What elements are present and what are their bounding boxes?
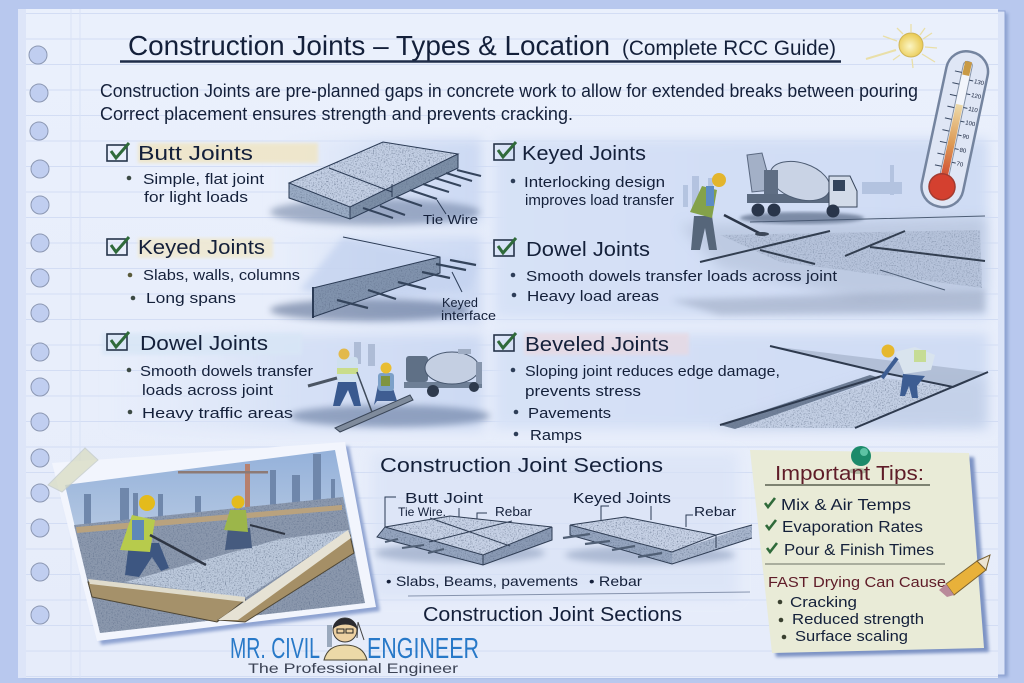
- effects list: Surface scaling: [795, 628, 908, 645]
- illustration: worker with rake: [690, 173, 769, 250]
- tips list: Evaporation Rates: [782, 519, 923, 536]
- panel: construction joint sections: [375, 455, 752, 626]
- heading: sections bottom: Construction Joint Sections: [423, 604, 682, 626]
- title: Construction Joints – Types & Location: [128, 30, 610, 61]
- heading: dowel joints: Dowel Joints: [526, 239, 650, 261]
- subheading: fast drying: FAST Drying Can Cause: [768, 574, 946, 591]
- panel: keyed and dowel joints right: [494, 142, 985, 315]
- logo wordmark: MR. CIVIL: [230, 633, 320, 665]
- heading highlight: [138, 238, 273, 258]
- bullet text: for light loads: [144, 189, 248, 206]
- bullet text: keyed joints: improves load transfer: [525, 192, 674, 209]
- icon: checkbox: [494, 333, 516, 351]
- effects list: Reduced strength: [792, 611, 924, 628]
- worker front: [120, 495, 206, 577]
- bullet text: [128, 267, 300, 307]
- bullet text: dowel joints: [511, 268, 838, 305]
- title: [120, 30, 841, 62]
- label: keyed interface: interface: [441, 308, 496, 323]
- diagram: butt joint: Tie Wire.: [398, 505, 446, 519]
- photo formwork: [88, 530, 354, 622]
- tips list: Mix & Air Temps: [781, 497, 911, 514]
- icon: thermometer: 110: [968, 107, 979, 115]
- bullet text: dowel joints: Heavy load areas: [527, 288, 659, 305]
- diagram: butt joint: Butt Joint: [405, 490, 484, 507]
- bullet text: Sloping joint reduces edge damage,: [525, 363, 780, 380]
- illustration background washes: [105, 139, 988, 599]
- binder holes: [29, 46, 49, 624]
- diagram: keyed joints: [563, 490, 752, 564]
- logo wordmark: [230, 633, 479, 665]
- sticky note: important tips: [750, 446, 990, 657]
- worker two: [374, 362, 397, 405]
- diagram: butt joint: [375, 490, 552, 565]
- illustration: mixer truck: [740, 153, 864, 224]
- worker one: [308, 348, 372, 412]
- panel: beveled joints: [494, 333, 988, 444]
- photo skyline and crane: [84, 454, 335, 526]
- icon: push pin: [849, 446, 871, 474]
- caption: • Slabs, Beams, pavements: [386, 573, 578, 589]
- heading: keyed joints: Keyed Joints: [522, 143, 646, 165]
- illustration: keyed joint wall: [270, 237, 478, 321]
- effects list: Cracking: [790, 594, 857, 611]
- icon: checkbox: [494, 142, 516, 160]
- effects list: [778, 594, 924, 645]
- bullet text: [511, 363, 780, 444]
- illustration: beveled slabs: [720, 346, 988, 429]
- logo tagline: The Professional Engineer: [248, 661, 459, 676]
- icon: thermometer: 80: [959, 148, 967, 155]
- bullet text: [127, 363, 313, 422]
- heading: Dowel Joints: [140, 333, 268, 355]
- bullet text: prevents stress: [525, 383, 641, 400]
- photo ground: [74, 497, 365, 633]
- heading highlight: [102, 333, 302, 355]
- illustration: concrete ground: [670, 216, 985, 315]
- diagram: butt joint: Rebar: [495, 504, 533, 519]
- caption: • Rebar: [589, 573, 642, 589]
- icon: thermometer: 130: [973, 79, 985, 87]
- bullet text: Slabs, walls, columns: [143, 267, 300, 284]
- illustration: workers and mixer truck: [290, 342, 490, 432]
- heading: Beveled Joints: [525, 334, 669, 356]
- icon: checkbox: [107, 237, 129, 255]
- bullet text: Smooth dowels transfer: [140, 363, 313, 380]
- bullet text: Long spans: [146, 290, 236, 307]
- bullet text: loads across joint: [142, 382, 274, 399]
- bullet text: dowel joints: Smooth dowels transfer loads across joint: [526, 268, 838, 285]
- logo wordmark: ENGINEER: [367, 633, 479, 665]
- intro text: Correct placement ensures strength and prevents cracking.: [100, 104, 573, 124]
- icon: checkbox: [494, 238, 516, 256]
- heading highlight: [524, 333, 689, 355]
- bullet text: Pavements: [528, 405, 611, 422]
- panel: keyed joints left: [107, 237, 496, 323]
- caption: [386, 573, 642, 589]
- heading: Butt Joints: [138, 143, 253, 165]
- worker back: [224, 496, 285, 550]
- bullet text: Ramps: [530, 427, 582, 444]
- intro text: [100, 81, 918, 124]
- title: (Complete RCC Guide): [622, 37, 836, 60]
- panel: dowel joints left: [102, 332, 490, 432]
- label: keyed interface: [441, 295, 496, 323]
- icon: thermometer: 70: [956, 161, 964, 169]
- panel: butt joints: [107, 142, 481, 227]
- heading highlight: [138, 143, 318, 163]
- bullet text: [127, 171, 265, 206]
- icon: checkbox: [107, 143, 129, 161]
- mixer truck: [404, 349, 482, 397]
- icon: thermometer: 120: [970, 93, 982, 101]
- tape: [48, 448, 98, 492]
- icon: checkbox: [107, 332, 129, 350]
- tips list: [765, 497, 934, 559]
- diagram: keyed joints: Rebar: [694, 504, 737, 519]
- photo: workers finishing concrete: [48, 442, 380, 645]
- heading: sections top: Construction Joint Sections: [380, 455, 663, 477]
- illustration: bending worker: [882, 344, 935, 398]
- diagram: keyed joints: Keyed Joints: [573, 490, 671, 507]
- logo: mr civil engineer: [230, 618, 479, 676]
- intro text: Construction Joints are pre-planned gaps in concrete work to allow for extended breaks between pouring: [100, 81, 918, 101]
- bullet text: Heavy traffic areas: [142, 405, 293, 422]
- icon: pencil: [939, 555, 990, 597]
- label: tie wire: Tie Wire: [423, 212, 478, 227]
- icon: sun: [866, 24, 937, 68]
- icon: thermometer: [918, 48, 992, 211]
- heading: Keyed Joints: [138, 237, 265, 259]
- illustration: butt joint slab: [270, 142, 481, 225]
- illustration: skyline: [683, 165, 902, 208]
- icon: thermometer: 100: [965, 120, 976, 128]
- icon: engineer avatar: [324, 618, 367, 660]
- tips list: Pour & Finish Times: [784, 542, 934, 559]
- heading: tips: Important Tips:: [775, 463, 924, 485]
- bullet text: keyed joints: Interlocking design: [524, 174, 665, 191]
- icon: thermometer: 90: [962, 134, 970, 141]
- bullet text: keyed joints: [511, 174, 674, 209]
- label: keyed interface: Keyed: [442, 295, 478, 310]
- bullet text: Simple, flat joint: [143, 171, 265, 188]
